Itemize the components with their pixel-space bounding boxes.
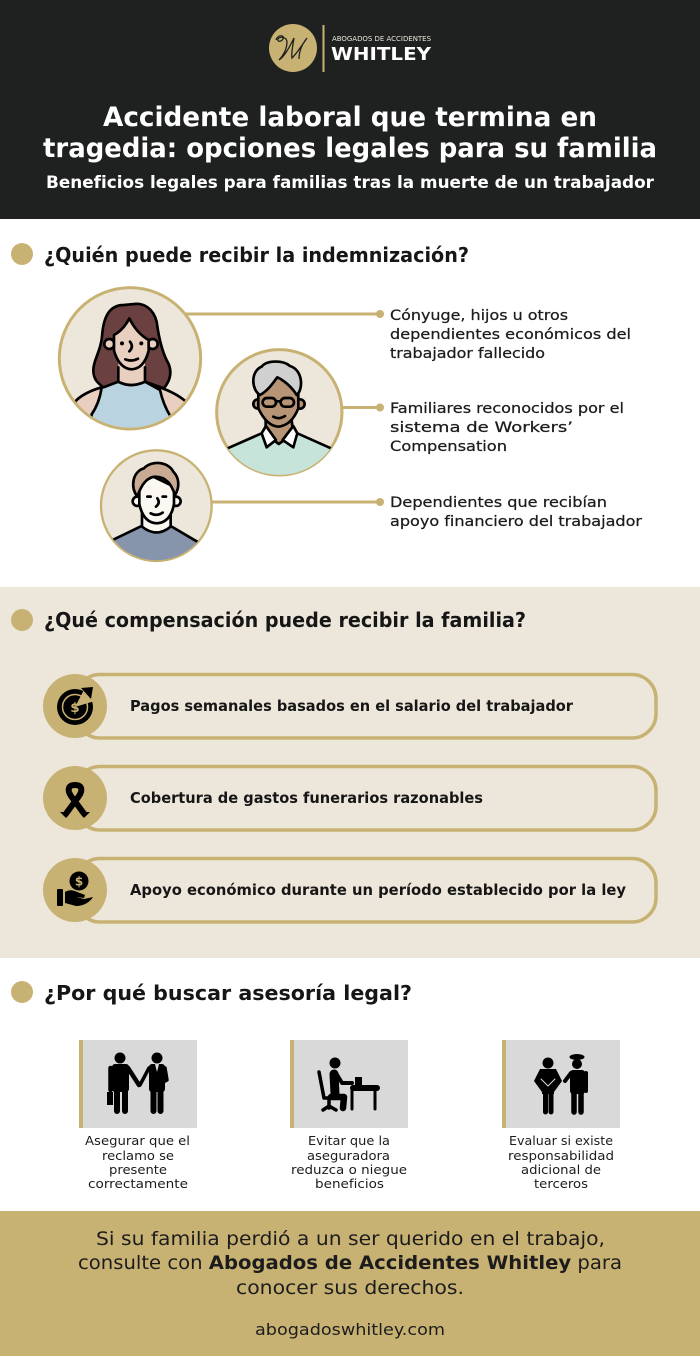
icon: circular dollar: [57, 686, 98, 725]
card: file claim: [79, 1040, 197, 1191]
panel: why seek legal advice: [11, 981, 620, 1191]
avatars: [59, 288, 342, 567]
caption: file claim: [85, 1133, 190, 1191]
avatar: young man: [101, 450, 212, 567]
text: recognised relatives: [390, 401, 624, 455]
caption: insurer: beneficios: [315, 1176, 384, 1191]
icon: hand holding coin: $: [75, 874, 83, 888]
caption: insurer: Evitar que la: [308, 1133, 390, 1148]
icon: hand holding coin: [57, 872, 93, 906]
text: financial dependants: Dependientes que recibían: [390, 495, 607, 511]
text: financial dependants: apoyo financiero del trabajador: [390, 514, 642, 530]
caption: third parties: responsabilidad: [508, 1148, 614, 1163]
caption: insurer: reduzca o niegue: [291, 1162, 407, 1177]
call to action text: conocer sus derechos.: [236, 1277, 464, 1299]
caption: file claim: presente: [109, 1162, 167, 1177]
text: spouse and children: [390, 308, 631, 362]
text: recognised relatives: Compensation: [390, 439, 507, 455]
caption: third parties: [508, 1133, 614, 1191]
call to action text: [78, 1228, 622, 1299]
connector lines: [185, 310, 384, 506]
row: financial support: Apoyo económico durante un período establecido por la ley: [130, 881, 626, 899]
row: financial support: [43, 858, 656, 922]
card: insurer: [290, 1040, 408, 1191]
icon: detainee and officer: [534, 1054, 586, 1112]
row: funeral costs: Cobertura de gastos funerarios razonables: [130, 789, 483, 807]
logo: WHITLEY: [331, 44, 432, 65]
caption: insurer: aseguradora: [307, 1148, 390, 1163]
avatar: older man: [217, 350, 342, 480]
panel: who can receive compensation: [11, 243, 642, 567]
text: recognised relatives: sistema de Workers’: [390, 420, 573, 436]
logo: ABOGADOS DE ACCIDENTES: [332, 35, 432, 43]
caption: insurer: [291, 1133, 407, 1191]
avatar: woman: [59, 288, 201, 433]
icon: circular dollar: $: [70, 700, 80, 716]
website: abogadoswhitley.com: [255, 1320, 445, 1339]
icon: two men handshake: [107, 1052, 167, 1111]
caption: third parties: terceros: [534, 1176, 588, 1191]
subtitle: Beneficios legales para familias tras la muerte de un trabajador: [46, 173, 655, 192]
panel: call to action footer: [0, 1211, 700, 1356]
row: funeral costs: [43, 766, 656, 830]
title: [43, 102, 657, 164]
title: Accidente laboral que termina en: [103, 102, 597, 133]
caption: file claim: correctamente: [88, 1176, 188, 1191]
panel: header: [0, 0, 700, 219]
text: spouse and children: Cónyuge, hijos u otros: [390, 308, 568, 324]
icon: ribbon: [60, 785, 90, 818]
panel: compensation: [0, 587, 700, 958]
caption: file claim: Asegurar que el: [85, 1133, 190, 1148]
row: weekly payments: Pagos semanales basados en el salario del trabajador: [130, 697, 574, 715]
card: third parties: [502, 1040, 620, 1191]
title: tragedia: opciones legales para su familia: [43, 133, 657, 164]
caption: file claim: reclamo se: [102, 1148, 174, 1163]
call to action text: consulte con Abogados de Accidentes Whitley para: [78, 1252, 622, 1274]
text: spouse and children: trabajador fallecido: [390, 346, 545, 362]
call to action text: Si su familia perdió a un ser querido en el trabajo,: [96, 1228, 605, 1250]
text: recognised relatives: Familiares reconocidos por el: [390, 401, 624, 417]
text: financial dependants: [390, 495, 642, 530]
row: weekly payments: [43, 674, 656, 738]
icon: person at desk: [319, 1058, 380, 1110]
caption: third parties: adicional de: [521, 1162, 601, 1177]
logo: [269, 24, 432, 72]
text: spouse and children: dependientes económicos del: [390, 327, 631, 343]
heading: why: ¿Por qué buscar asesoría legal?: [44, 981, 412, 1005]
heading: who: ¿Quién puede recibir la indemnización?: [44, 243, 469, 267]
heading: compensation: ¿Qué compensación puede recibir la familia?: [44, 608, 526, 632]
caption: third parties: Evaluar si existe: [509, 1133, 613, 1148]
